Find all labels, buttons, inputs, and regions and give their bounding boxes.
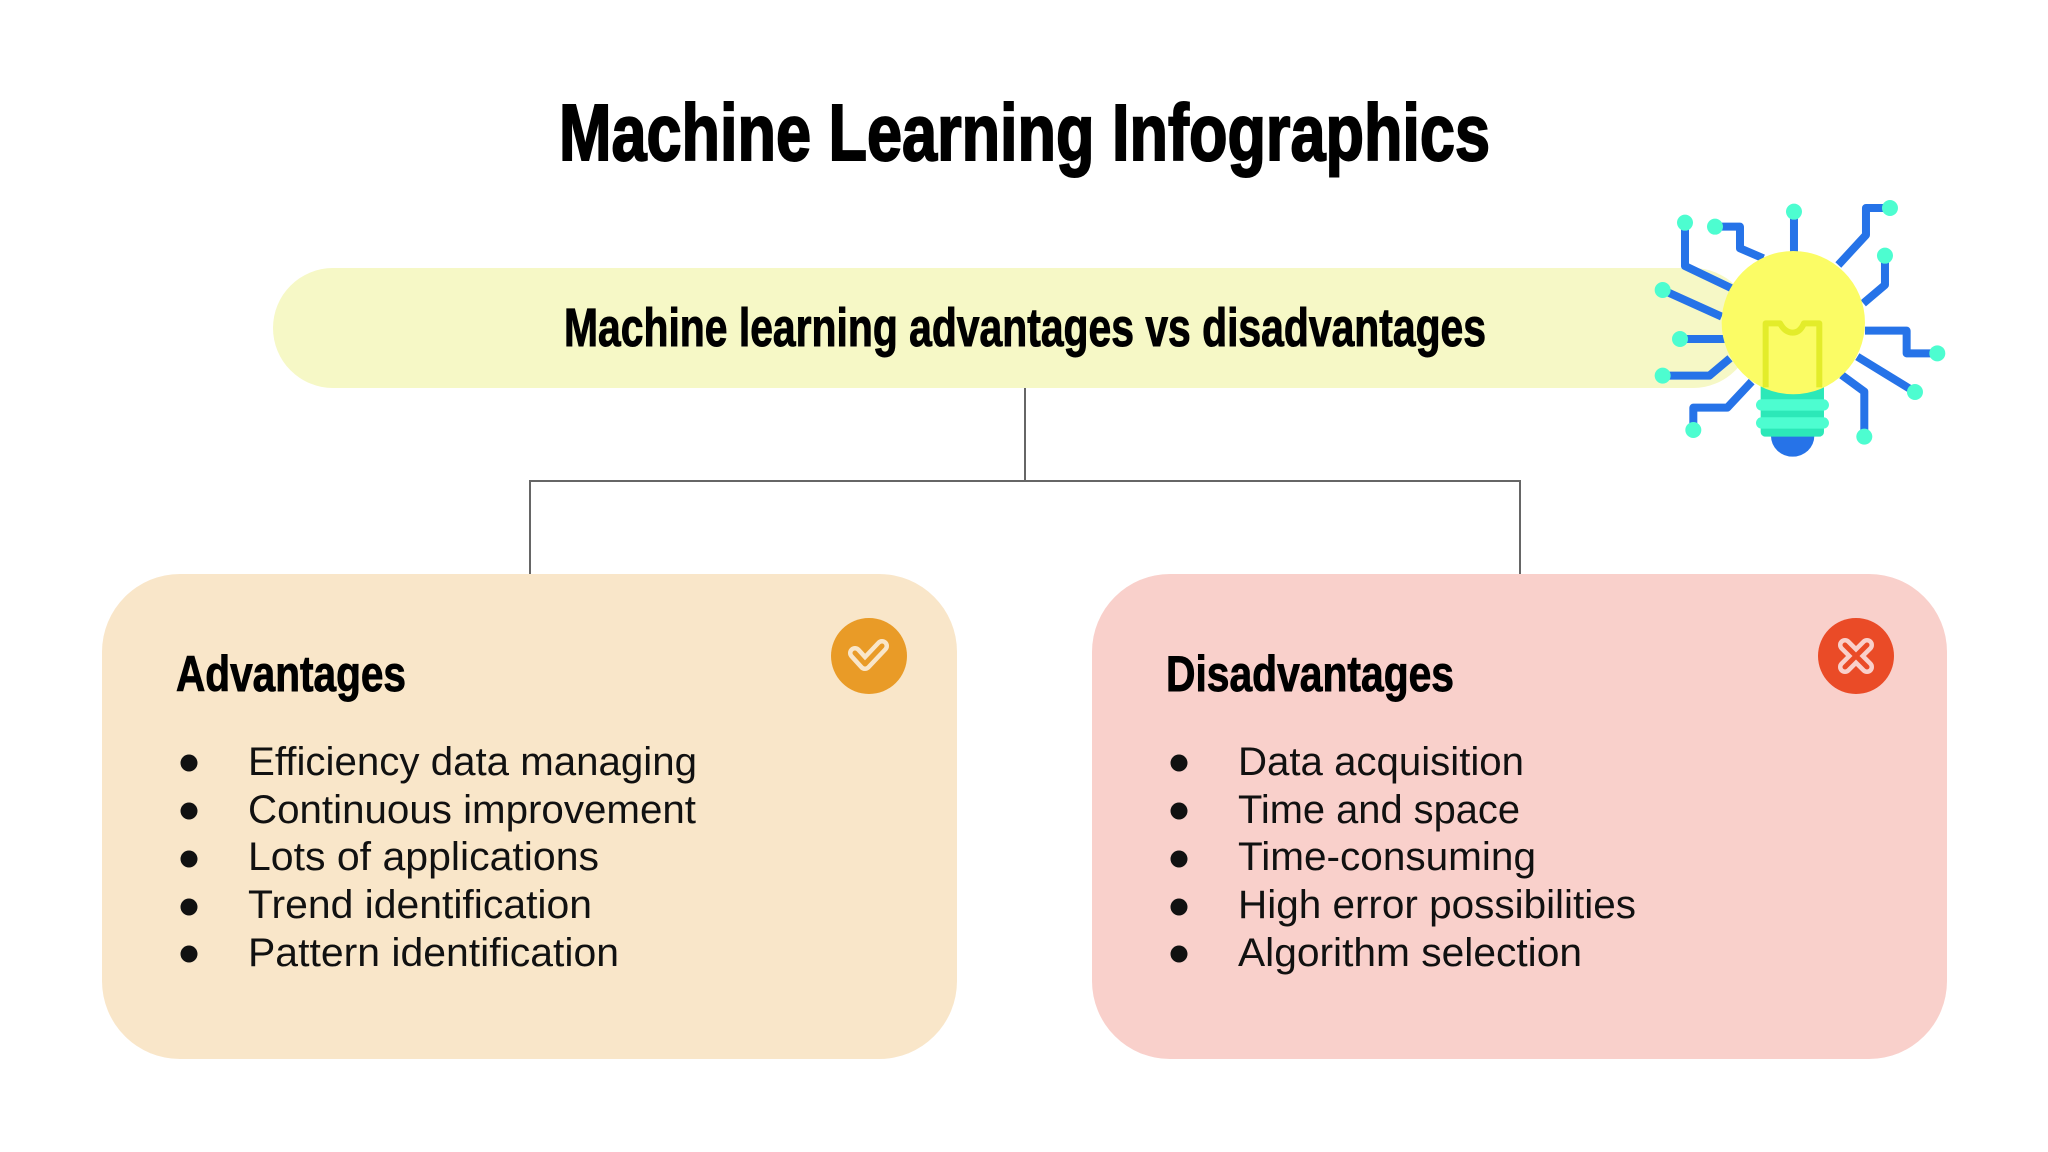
disadvantages list: Algorithm selection bbox=[1238, 931, 1582, 975]
icon: light bulb with circuit lines bbox=[1655, 200, 1945, 457]
connector lines bbox=[530, 388, 1520, 574]
subtitle pill bbox=[273, 268, 1753, 388]
disadvantages list: High error possibilities bbox=[1238, 883, 1636, 927]
disadvantages heading: Disadvantages bbox=[1166, 646, 1454, 702]
panel: advantages bbox=[102, 574, 957, 1059]
icon: check bbox=[831, 618, 907, 694]
disadvantages list: Time-consuming bbox=[1238, 835, 1536, 879]
advantages list: Continuous improvement bbox=[248, 788, 696, 832]
disadvantages list: Data acquisition bbox=[1238, 740, 1524, 784]
advantages list: Efficiency data managing bbox=[248, 740, 697, 784]
icon: cross bbox=[1818, 618, 1894, 694]
panel: disadvantages bbox=[1092, 574, 1947, 1059]
disadvantages list: Time and space bbox=[1238, 788, 1520, 832]
advantages list: Pattern identification bbox=[248, 931, 619, 975]
advantages heading: Advantages bbox=[176, 646, 406, 702]
advantages list: Trend identification bbox=[248, 883, 592, 927]
subtitle: Machine learning advantages vs disadvantages bbox=[564, 298, 1486, 358]
advantages list bbox=[180, 740, 697, 975]
title: Machine Learning Infographics bbox=[559, 88, 1490, 177]
advantages list: Lots of applications bbox=[248, 835, 599, 879]
disadvantages list bbox=[1170, 740, 1636, 975]
